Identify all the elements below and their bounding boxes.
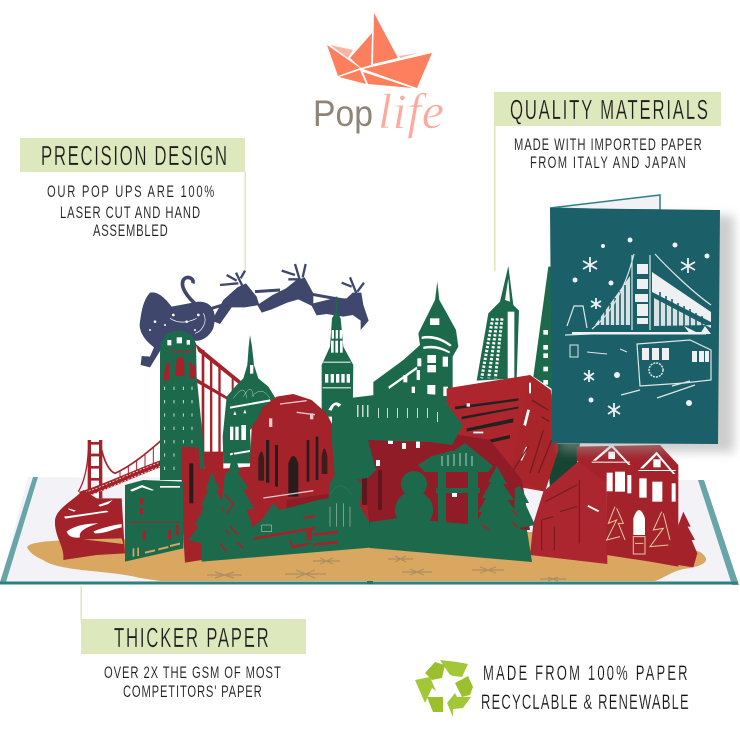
left group traced in zoom coordinates [125, 264, 370, 563]
recycle text [481, 661, 689, 714]
front green panel with trees [188, 452, 370, 562]
text block: thicker paper: OVER 2X THE GSM OF MOST [104, 663, 281, 682]
open card base pages [0, 477, 739, 585]
card shadow [556, 212, 734, 452]
coit tower [157, 330, 205, 484]
flatiron building [373, 282, 458, 403]
right group traced in zoom coordinates [373, 266, 697, 567]
ferry building clock tower [322, 297, 353, 417]
snowflakes and dots [572, 238, 710, 406]
right green panel [370, 443, 535, 562]
recycle text: MADE FROM 100% PAPER [483, 661, 688, 685]
text block: thicker paper [104, 663, 281, 701]
text block: precision design [47, 182, 215, 240]
dark green buildings behind [547, 443, 580, 488]
text block: quality materials: FROM ITALY AND JAPAN [530, 153, 686, 172]
red victorian houses [577, 444, 697, 567]
torii gate [418, 443, 493, 530]
card cut-out bridge and tram [565, 238, 711, 417]
text block: quality materials: MADE WITH IMPORTED PAPER [514, 135, 702, 154]
connector line: quality materials [494, 126, 496, 271]
pagoda canopy [332, 392, 463, 482]
logo word: Pop: Pop [313, 93, 373, 134]
heading: thicker paper: THICKER PAPER [114, 622, 269, 653]
connector line: thicker paper [80, 586, 82, 622]
greeting card [550, 195, 734, 452]
logo: Poplife [313, 13, 444, 139]
red wall behind gate [360, 430, 530, 530]
panel: precision design [20, 138, 245, 240]
pine tree two [222, 452, 255, 540]
orange paper ground [27, 530, 706, 581]
connector line: precision design [244, 172, 246, 272]
recycle text: RECYCLABLE & RENEWABLE [481, 690, 689, 714]
text block: thicker paper: COMPETITORS' PAPER [123, 682, 262, 701]
card back cover [550, 195, 660, 210]
right pine trees [475, 466, 535, 537]
Golden Gate bridge behind tower [195, 343, 242, 470]
red palace of fine arts and wall [182, 394, 370, 563]
text block: precision design: ASSEMBLED [93, 221, 168, 240]
icon: origami boat [327, 13, 432, 88]
main bridge [565, 254, 711, 335]
panel: recyclable [415, 660, 689, 717]
text block: precision design: LASER CUT AND HAND [60, 203, 200, 222]
logo word: life: life [378, 83, 444, 139]
icon: recycle arrows [415, 660, 473, 717]
text block: quality materials [514, 135, 702, 172]
panel: quality materials [494, 92, 721, 172]
green block with windows at left [125, 480, 183, 562]
heading: quality materials: QUALITY MATERIALS [510, 94, 708, 125]
transamerica pyramid [477, 266, 519, 381]
red angled building [447, 375, 558, 492]
second skyscraper behind card [533, 267, 553, 390]
heading: thicker paper [81, 619, 306, 654]
text block: precision design: OUR POP UPS ARE 100% [47, 182, 215, 201]
card front [550, 208, 720, 444]
Santa sleigh and reindeer silhouette [140, 264, 369, 367]
snowflakes on ground [207, 556, 566, 581]
left bridge with red wave [55, 440, 162, 560]
pop-up card illustration [0, 264, 739, 585]
heading: precision design: PRECISION DESIGN [41, 140, 227, 171]
tram [570, 340, 711, 398]
panel base [370, 518, 532, 562]
snowman [395, 471, 433, 529]
panel: thicker paper [81, 619, 306, 701]
dome building [223, 335, 277, 470]
pine tree one [188, 472, 232, 545]
red house [530, 460, 607, 564]
